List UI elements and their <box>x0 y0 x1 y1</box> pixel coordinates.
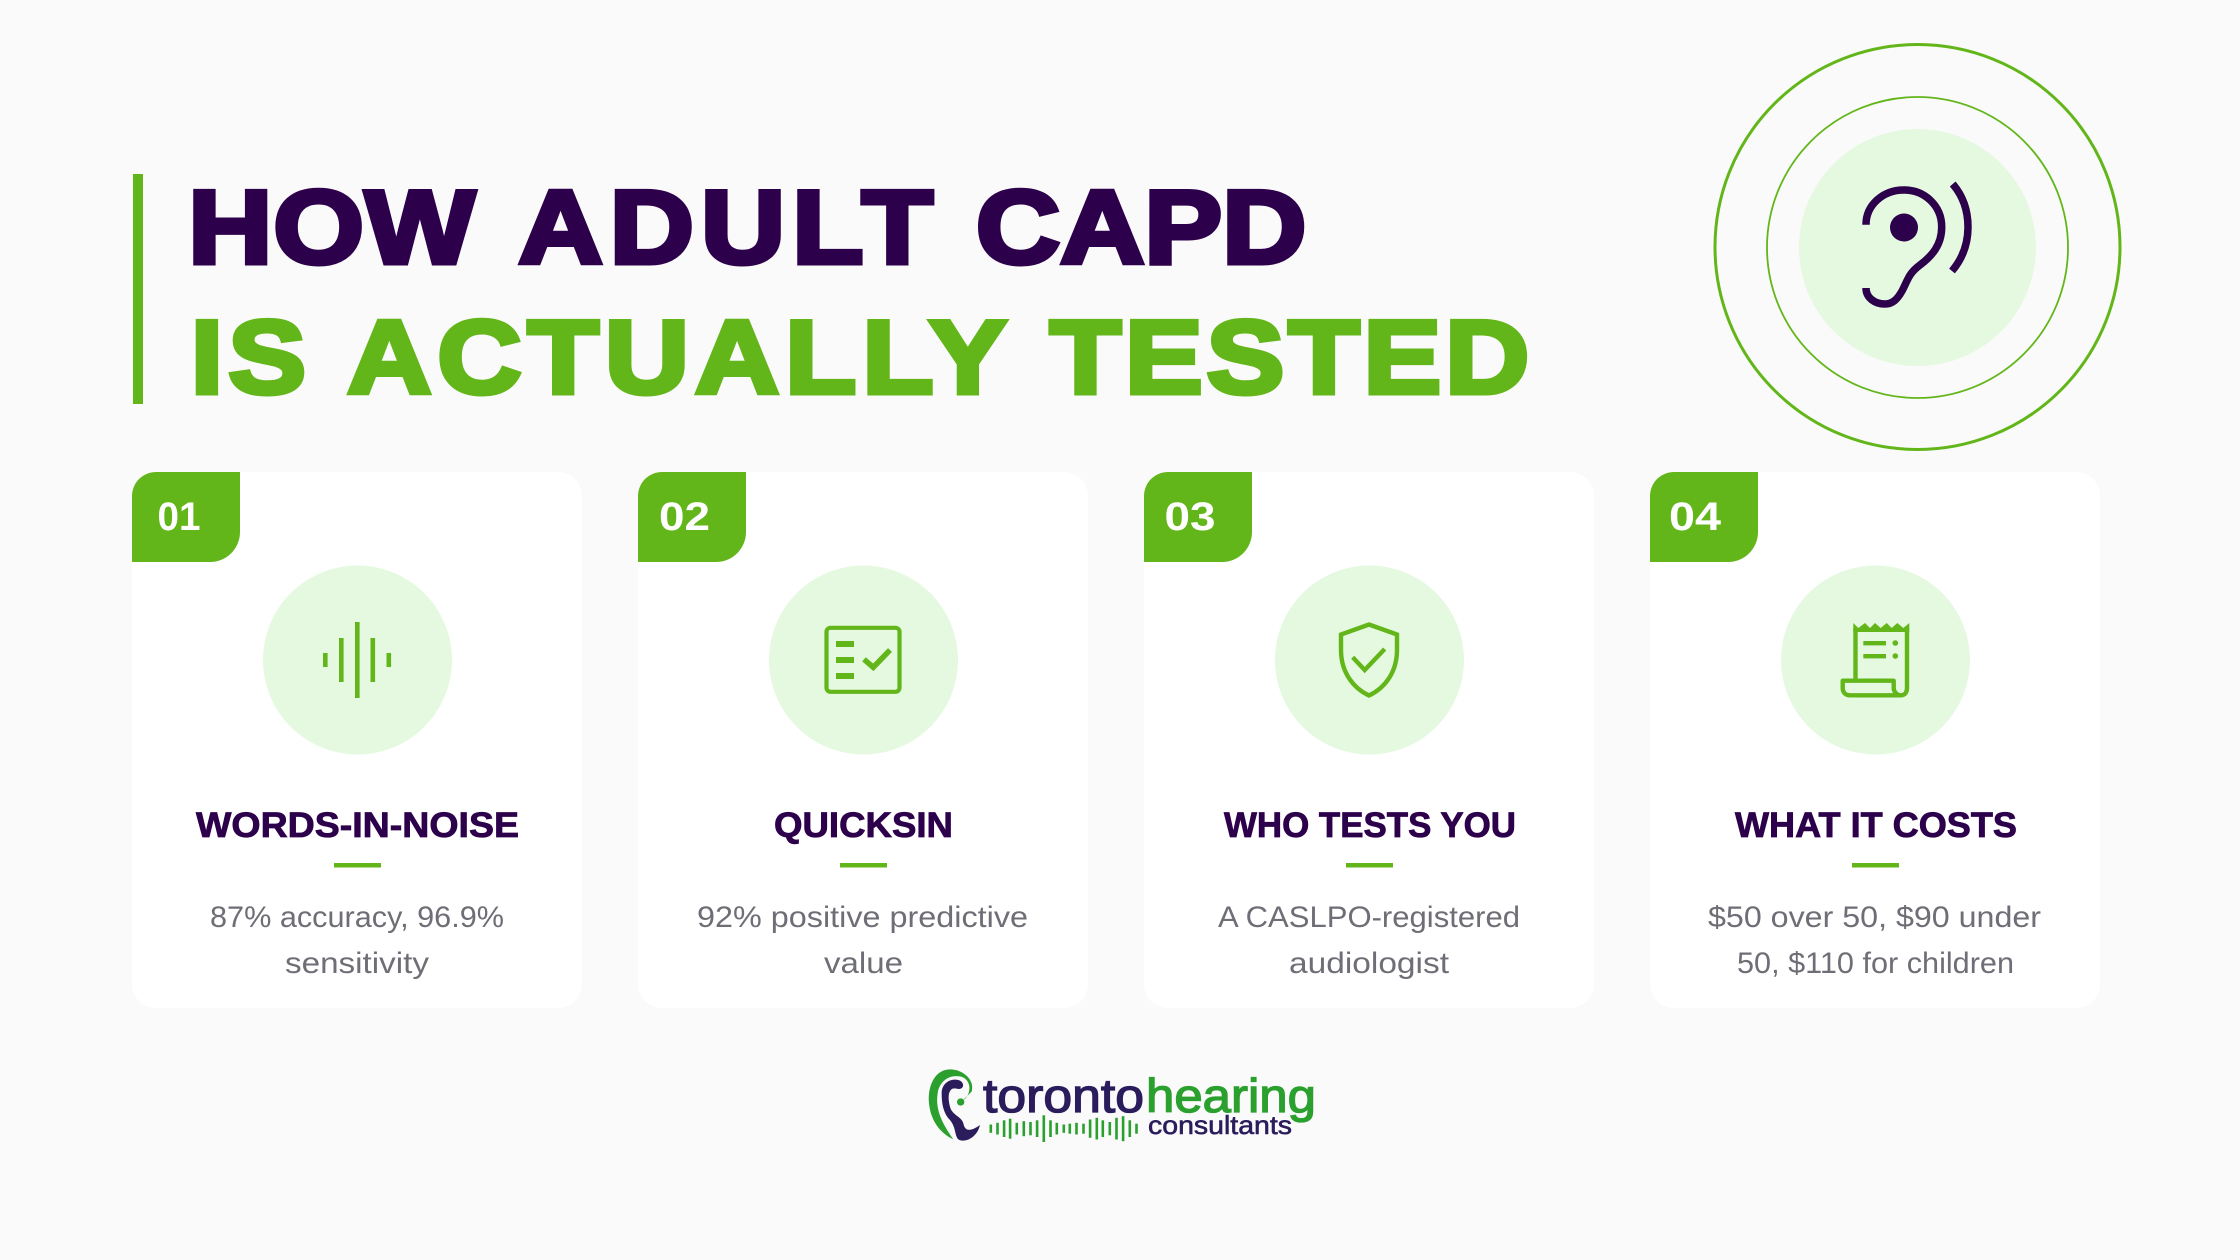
description: 87% accuracy, 96.9% <box>210 901 504 934</box>
title line 1: HOW <box>188 170 476 286</box>
description <box>1218 901 1520 980</box>
number badge 03 <box>1144 472 1252 562</box>
icon: checklist <box>769 566 958 754</box>
number badge 04: 04 <box>1669 495 1722 539</box>
description <box>697 901 1028 980</box>
heading: QUICKSIN <box>774 806 953 845</box>
title line 1: ADULT <box>519 170 933 286</box>
description <box>210 901 504 980</box>
description: value <box>824 947 903 980</box>
heading: WORDS-IN-NOISE <box>196 806 519 845</box>
heading: WHAT IT COSTS <box>1735 806 2017 845</box>
description: 92% positive predictive <box>697 901 1028 934</box>
icon: ear with concentric rings <box>1715 44 2120 450</box>
title line 2: ACTUALLY <box>347 300 1007 416</box>
title line 1: CAPD <box>976 170 1306 286</box>
icon: receipt <box>1781 566 1970 754</box>
panel: quicksin <box>638 472 1088 1008</box>
logo waveform <box>990 1115 1138 1142</box>
panel: words-in-noise <box>132 472 582 1008</box>
logo ear mark <box>929 1069 980 1141</box>
number badge 01 <box>132 472 240 562</box>
title line 2: TESTED <box>1050 300 1529 416</box>
logo wordmark consultants: consultants <box>1148 1110 1292 1140</box>
number badge 03: 03 <box>1164 495 1216 539</box>
heading rule <box>1852 863 1899 868</box>
card background <box>638 472 1088 1008</box>
icon: shield with check <box>1275 566 1464 754</box>
title block <box>133 170 1529 416</box>
heading rule <box>334 863 381 868</box>
description <box>1708 901 2041 980</box>
description: A CASLPO-registered <box>1218 901 1520 934</box>
panel: who tests you <box>1144 472 1594 1008</box>
number badge 01: 01 <box>158 495 200 539</box>
number badge 02 <box>638 472 746 562</box>
number badge 04 <box>1650 472 1758 562</box>
description: $50 over 50, $90 under <box>1708 901 2041 934</box>
logo wordmark toronto: toronto <box>983 1069 1144 1122</box>
heading rule <box>840 863 887 868</box>
title accent bar <box>133 174 143 404</box>
panel: what it costs <box>1650 472 2100 1008</box>
card background <box>132 472 582 1008</box>
description: sensitivity <box>285 947 429 980</box>
logo: toronto hearing consultants <box>929 1069 1316 1142</box>
logo wordmark hearing: hearing <box>1146 1069 1316 1122</box>
heading rule <box>1346 863 1393 868</box>
card background <box>1144 472 1594 1008</box>
description: audiologist <box>1289 947 1450 980</box>
card background <box>1650 472 2100 1008</box>
number badge 02: 02 <box>659 495 710 539</box>
description: 50, $110 for children <box>1737 947 2014 980</box>
title line 2: IS <box>191 300 306 416</box>
heading: WHO TESTS YOU <box>1224 806 1516 845</box>
icon: sound wave <box>263 566 452 754</box>
